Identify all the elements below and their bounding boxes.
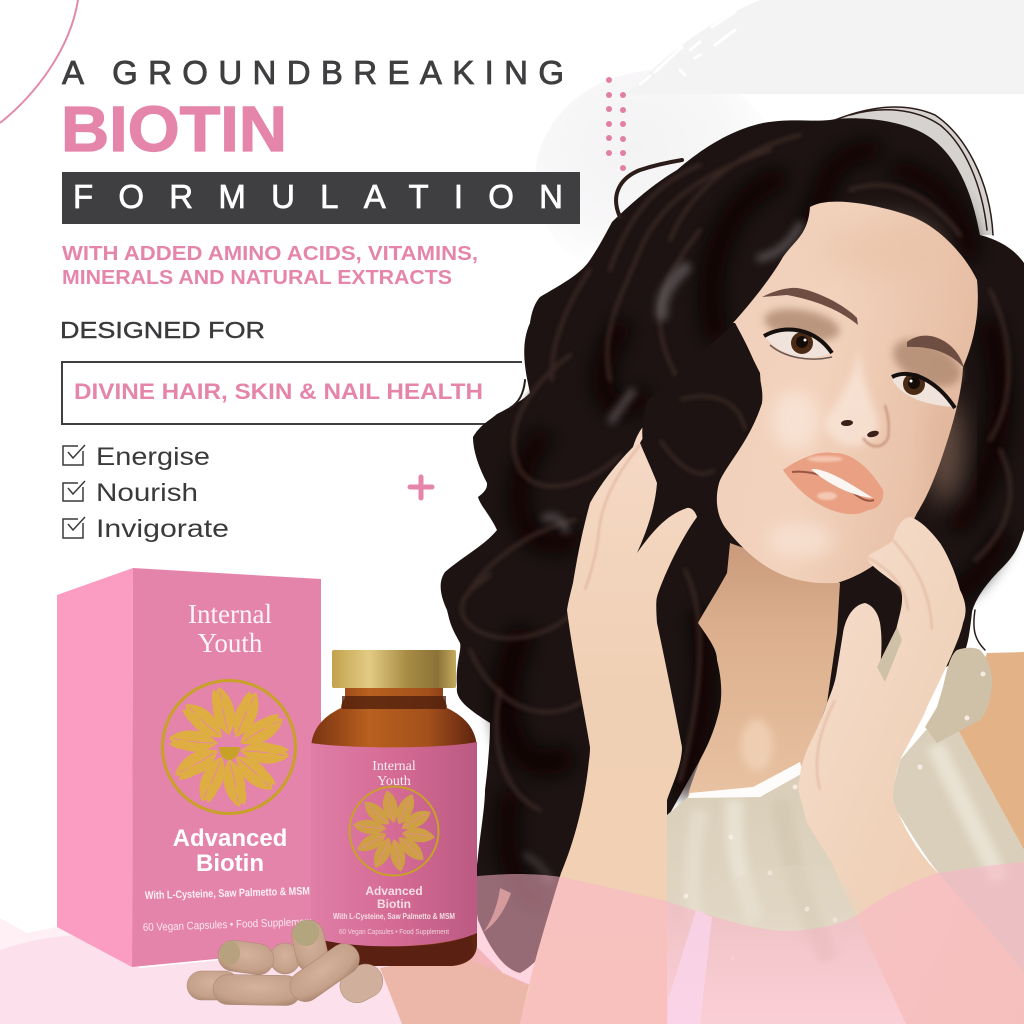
box front face	[132, 568, 321, 967]
icon: checkbox invigorate	[63, 517, 85, 538]
bottle emblem	[350, 786, 438, 876]
top right grey brush backdrop	[535, 0, 1024, 290]
capsules	[187, 917, 389, 1009]
box emblem	[162, 680, 296, 814]
left shoulder	[380, 948, 535, 1024]
brown hair strands	[462, 135, 1010, 810]
peach hair tip	[483, 888, 511, 932]
capsule upright	[289, 917, 331, 975]
hair lock strands	[660, 396, 745, 474]
bottle capsule count: 60 Vegan Capsules • Food Supplement	[339, 929, 449, 936]
bottle neck shading	[342, 696, 446, 709]
bottle brand name: Youth	[377, 774, 411, 789]
bottle cap	[332, 650, 456, 688]
forehead shading	[820, 222, 940, 278]
dress bodice	[667, 770, 930, 1024]
lips	[783, 452, 883, 514]
text: nourish: Nourish	[96, 479, 198, 507]
face side shadow	[929, 395, 961, 505]
cheek highlight	[771, 390, 819, 450]
capsule long	[213, 974, 301, 1006]
heading: Biotin: BIOTIN	[61, 93, 287, 165]
nose	[825, 345, 889, 446]
decorative arc top left	[0, 0, 78, 123]
hair mass	[441, 107, 1024, 973]
face	[717, 202, 978, 583]
subtitle	[62, 243, 478, 289]
pink overlay wave	[470, 862, 1024, 1024]
benefits checklist	[63, 443, 229, 543]
box brand name	[188, 599, 272, 658]
right shoulder	[958, 652, 1024, 850]
heading bar: Formulation	[62, 172, 580, 224]
glossy hair highlights	[525, 225, 800, 880]
flyaway strands	[510, 107, 993, 650]
chin highlight	[766, 522, 834, 558]
callout box: DIVINE HAIR, SKIN & NAIL HEALTH	[74, 379, 483, 404]
box capsule count: 60 Vegan Capsules • Food Supplement	[143, 916, 313, 934]
dark hair depth	[506, 150, 1000, 900]
heading bar: Formulation: FORMULATION	[73, 178, 563, 215]
box left face	[57, 568, 133, 967]
pale pink floor wave	[0, 918, 402, 1024]
box brand name: Youth	[198, 628, 263, 658]
product box	[57, 568, 321, 967]
bottle tagline: With L-Cysteine, Saw Palmetto & MSM	[333, 912, 455, 921]
decorative dots	[606, 77, 626, 171]
icon: plus	[410, 477, 432, 498]
box brand name: Internal	[188, 599, 272, 629]
collarbone highlight	[741, 719, 773, 771]
bottle	[311, 650, 477, 966]
bottle base	[315, 935, 474, 966]
capsule behind	[270, 943, 300, 974]
hair lock over fingers	[642, 323, 762, 512]
dress sleeve	[890, 730, 1024, 975]
dress pearls	[684, 672, 986, 1010]
left hand and arm	[520, 423, 697, 1024]
heading: A groundbreaking: A GROUNDBREAKING	[62, 54, 564, 91]
callout box	[62, 362, 522, 424]
hair fringe tone	[835, 107, 993, 235]
dress	[667, 730, 1024, 1024]
subtitle: MINERALS AND NATURAL EXTRACTS	[62, 267, 452, 289]
box product name: Advanced	[173, 825, 287, 852]
hair silhouette	[441, 118, 1024, 973]
left eye	[764, 329, 832, 359]
label: designed for: DESIGNED FOR	[60, 317, 265, 343]
capsule right	[334, 958, 389, 1009]
bottle label	[311, 742, 477, 946]
bottle product name: Advanced	[365, 884, 423, 898]
eye shadow	[762, 304, 968, 396]
capsule top	[216, 938, 276, 977]
capsule far left	[187, 971, 239, 1000]
box product name: Biotin	[196, 850, 264, 877]
eyebrows	[762, 288, 858, 325]
bottle product name: Biotin	[377, 897, 411, 911]
text: energise: Energise	[96, 443, 210, 471]
subtitle: WITH ADDED AMINO ACIDS, VITAMINS,	[62, 243, 478, 265]
dress collar	[688, 762, 803, 798]
face shape	[717, 202, 978, 583]
bottle brand name: Internal	[372, 759, 416, 774]
text: invigorate: Invigorate	[96, 515, 229, 543]
right hand and arm	[798, 517, 1024, 1024]
neck	[688, 543, 840, 797]
box product name	[173, 825, 287, 877]
bottle glass	[311, 688, 477, 966]
right eye	[892, 373, 955, 408]
scrunchie	[877, 627, 992, 743]
bottle product name	[365, 884, 423, 911]
woman photo illustration	[380, 107, 1024, 1024]
bottle brand name	[372, 759, 416, 789]
icon: checkbox nourish	[63, 481, 85, 501]
icon: checkbox energise	[63, 445, 85, 465]
box tagline: With L-Cysteine, Saw Palmetto & MSM	[145, 885, 310, 902]
capsule front	[284, 938, 366, 1008]
